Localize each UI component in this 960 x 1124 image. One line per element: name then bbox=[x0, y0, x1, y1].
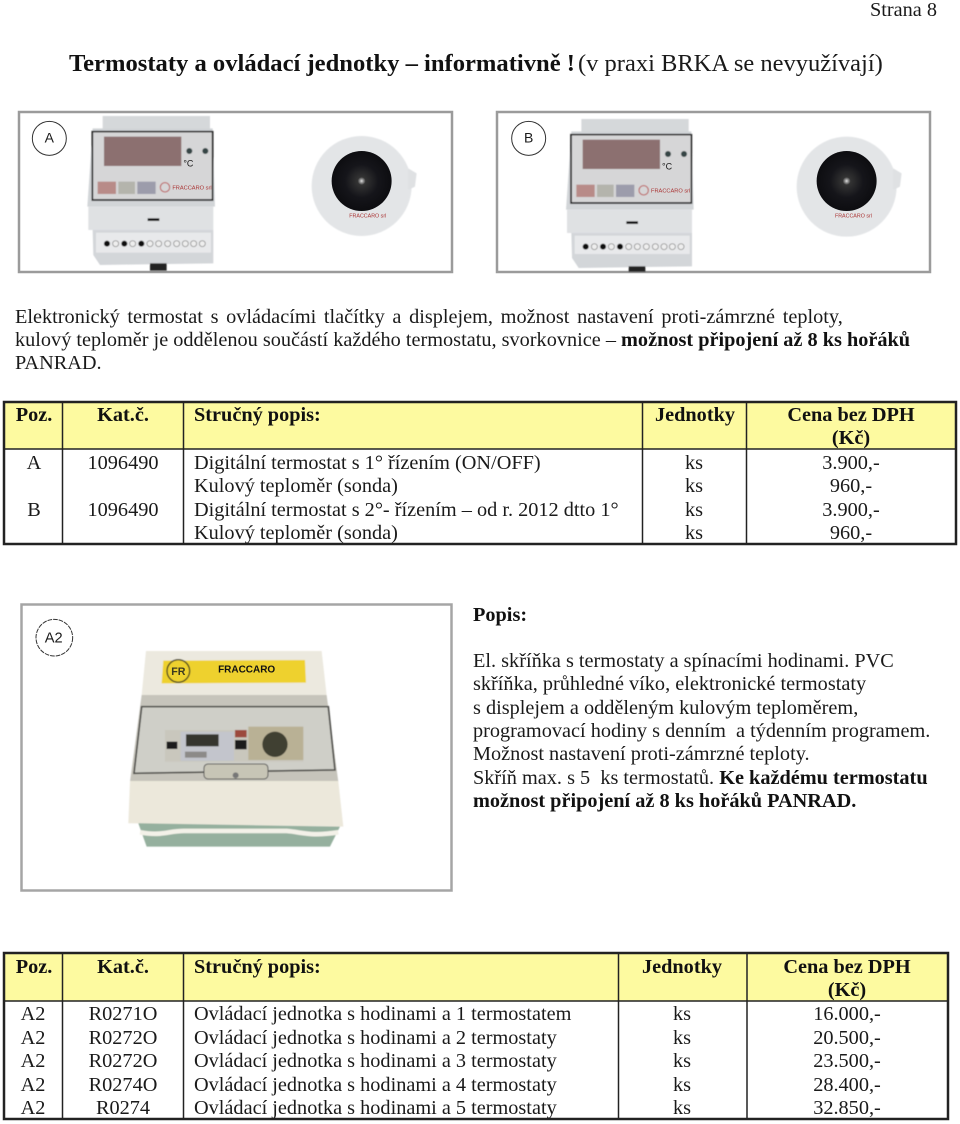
description: Popis: El. skříňka s termostaty a spínacími hodinami. PVC bbox=[473, 650, 894, 672]
description: Popis: Možnost nastavení proti-zámrzné teploty. bbox=[473, 743, 810, 765]
label A2 bbox=[36, 619, 73, 656]
description: Popis: možnost připojení až 8 ks hořáků PANRAD. bbox=[473, 790, 856, 812]
description: Popis: Skříň max. s 5 ks termostatů. Ke každému termostatu bbox=[473, 767, 928, 789]
icon: thermostat device A bbox=[87, 116, 215, 271]
table 2 header: Jednotky bbox=[642, 956, 722, 978]
table 2 rows: A2 bbox=[21, 1027, 45, 1049]
icon: thermostat device B bbox=[566, 119, 694, 272]
description paragraph: Elektronický termostat s ovládacími tlačítky a displejem, možnost nastavení proti-zámrzné teploty, bbox=[15, 306, 843, 328]
table 1 rows: 3.900,- bbox=[822, 499, 880, 521]
table 1 rows: ks bbox=[685, 452, 703, 474]
device A lettering: °C bbox=[183, 159, 194, 169]
table 2 rows: R0272O bbox=[89, 1050, 157, 1072]
table 2 rows: Ovládací jednotka s hodinami a 4 termostaty bbox=[194, 1074, 558, 1096]
description paragraph bbox=[15, 306, 910, 374]
table 2 rows bbox=[21, 1003, 881, 1119]
title: (v praxi BRKA se nevyužívají) bbox=[578, 50, 883, 77]
description: Popis: Popis: bbox=[473, 604, 527, 626]
table 1 rows bbox=[27, 452, 880, 544]
table 1 header bbox=[16, 404, 915, 449]
title: Termostaty a ovládací jednotky – informativně ! bbox=[69, 50, 575, 77]
table 2 rows: Ovládací jednotka s hodinami a 2 termostaty bbox=[194, 1027, 558, 1049]
table 2 rows: 20.500,- bbox=[813, 1027, 881, 1049]
table 1 rows: 960,- bbox=[830, 475, 872, 497]
table 2 rows: ks bbox=[673, 1003, 691, 1025]
description: Popis bbox=[473, 604, 930, 812]
device B lettering bbox=[651, 162, 690, 194]
table 2 rows: 16.000,- bbox=[813, 1003, 881, 1025]
table 1 header: (Kč) bbox=[832, 427, 870, 449]
table 2 header: Cena bez DPH bbox=[783, 956, 911, 978]
label A: A bbox=[45, 130, 55, 146]
table 2 header: Stručný popis: bbox=[194, 956, 321, 978]
table 2: control units bbox=[4, 953, 948, 1119]
icon: ball sensor A bbox=[312, 136, 417, 236]
photo panel A2: control box bbox=[22, 604, 452, 890]
table 1 header: Jednotky bbox=[655, 404, 735, 426]
table 1 rows: 1096490 bbox=[88, 452, 158, 474]
table 2 rows: A2 bbox=[21, 1074, 45, 1096]
table 1 rows: ks bbox=[685, 522, 703, 544]
table 1 rows: 1096490 bbox=[88, 499, 158, 521]
table 1 rows: Kulový teploměr (sonda) bbox=[194, 522, 398, 544]
table 1 header: Kat.č. bbox=[97, 404, 149, 426]
title bbox=[69, 50, 883, 77]
device A lettering: FRACCARO srl bbox=[172, 185, 212, 191]
table 2 rows: ks bbox=[673, 1074, 691, 1096]
table 2 rows: R0272O bbox=[89, 1027, 157, 1049]
table 1 header: Poz. bbox=[16, 404, 52, 426]
device A lettering bbox=[172, 159, 212, 191]
table 2 rows: R0271O bbox=[89, 1003, 157, 1025]
device B lettering: °C bbox=[662, 162, 673, 172]
table 1 rows: A bbox=[27, 452, 42, 474]
table 2 rows: A2 bbox=[21, 1050, 45, 1072]
table 1 rows: 960,- bbox=[830, 522, 872, 544]
table 2 rows: Ovládací jednotka s hodinami a 1 termostatem bbox=[194, 1003, 572, 1025]
table 2 rows: Ovládací jednotka s hodinami a 5 termostaty bbox=[194, 1097, 558, 1119]
table 2 rows: A2 bbox=[21, 1003, 45, 1025]
table 1 rows: ks bbox=[685, 499, 703, 521]
icon: control box bbox=[128, 651, 343, 847]
table 1 rows: Digitální termostat s 2°- řízením – od r. 2012 dtto 1° bbox=[194, 499, 619, 521]
label A bbox=[32, 121, 66, 155]
table 1 rows: Kulový teploměr (sonda) bbox=[194, 475, 398, 497]
icon: ball sensor B bbox=[797, 137, 902, 237]
label B: B bbox=[524, 130, 533, 146]
description: Popis: skříňka, průhledné víko, elektronické termostaty bbox=[473, 673, 867, 695]
icon: control box: FR bbox=[171, 666, 186, 678]
label B bbox=[512, 121, 546, 155]
table 1 header: Cena bez DPH bbox=[787, 404, 915, 426]
table 2 header bbox=[16, 956, 911, 1001]
table 1 rows: Digitální termostat s 1° řízením (ON/OFF) bbox=[194, 452, 541, 474]
table 2 rows: R0274O bbox=[89, 1074, 157, 1096]
icon: ball sensor B: FRACCARO srl bbox=[835, 213, 872, 219]
table 2 rows: ks bbox=[673, 1097, 691, 1119]
photo panel B: thermostat and sensor bbox=[497, 112, 930, 272]
description: Popis: programovací hodiny s denním a týdenním programem. bbox=[473, 720, 930, 742]
device B lettering: FRACCARO srl bbox=[651, 188, 690, 194]
table 1: thermostats bbox=[4, 402, 956, 544]
description paragraph: PANRAD. bbox=[15, 352, 102, 374]
table 2 rows: 32.850,- bbox=[813, 1097, 881, 1119]
description paragraph: kulový teploměr je oddělenou součástí každého termostatu, svorkovnice – možnost připojení až 8 ks hořáků bbox=[15, 329, 910, 351]
table 1 rows: 3.900,- bbox=[822, 452, 880, 474]
table 2 rows: A2 bbox=[21, 1097, 45, 1119]
table 1 header: Stručný popis: bbox=[194, 404, 321, 426]
photo panel A: thermostat and sensor bbox=[19, 112, 452, 272]
icon: ball sensor A: FRACCARO srl bbox=[349, 213, 386, 219]
description: Popis: s displejem a odděleným kulovým teploměrem, bbox=[473, 697, 858, 719]
label A2: A2 bbox=[45, 631, 63, 647]
table 2 rows: R0274 bbox=[96, 1097, 150, 1119]
table 1 rows: B bbox=[27, 499, 41, 521]
table 2 header: (Kč) bbox=[828, 979, 866, 1001]
table 1 rows: ks bbox=[685, 475, 703, 497]
table 2 header: Poz. bbox=[16, 956, 52, 978]
icon: control box: FRACCARO bbox=[218, 664, 275, 675]
table 2 rows: ks bbox=[673, 1050, 691, 1072]
table 2 rows: Ovládací jednotka s hodinami a 3 termostaty bbox=[194, 1050, 558, 1072]
table 2 rows: ks bbox=[673, 1027, 691, 1049]
table 2 rows: 28.400,- bbox=[813, 1074, 881, 1096]
table 2 header: Kat.č. bbox=[97, 956, 149, 978]
table 2 rows: 23.500,- bbox=[813, 1050, 881, 1072]
